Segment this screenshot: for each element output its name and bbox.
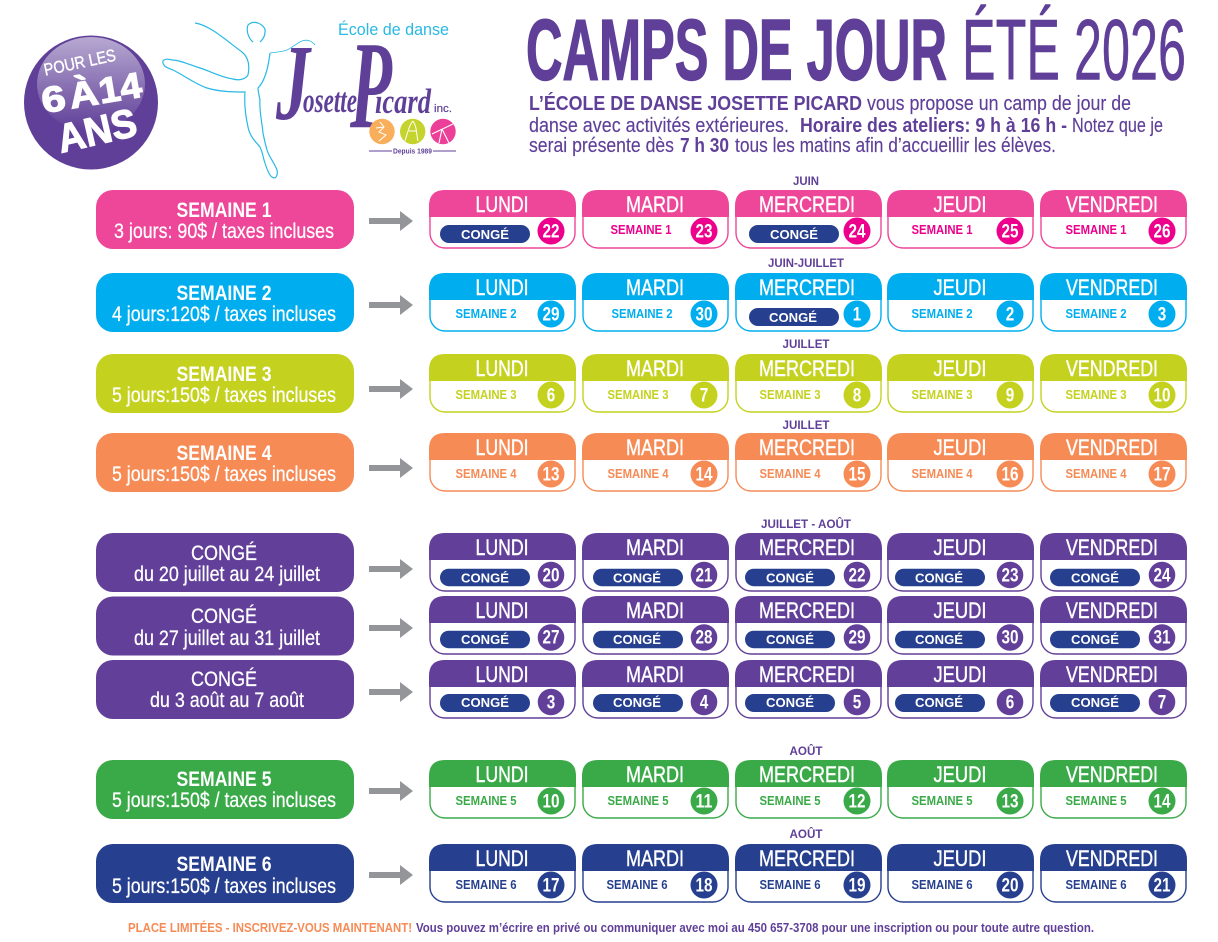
school name: École de danse xyxy=(338,20,449,39)
mercredi 24: 24 xyxy=(848,222,866,242)
row: semaine 2 xyxy=(96,256,1187,332)
mardi 11: 11 xyxy=(696,792,713,812)
vendredi 10: 10 xyxy=(1154,386,1170,406)
lundi 17: 17 xyxy=(542,876,560,896)
intro paragraph: Horaire des ateliers: 9 h à 16 h - xyxy=(800,115,1067,137)
intro paragraph: L’ÉCOLE DE DANSE JOSETTE PICARD xyxy=(529,92,862,115)
jeudi 9: 9 xyxy=(1006,386,1014,406)
icon: dancer outline xyxy=(163,22,315,178)
jeudi 25 xyxy=(887,190,1034,248)
lundi 6: 6 xyxy=(547,386,555,406)
intro paragraph xyxy=(529,92,1163,157)
vendredi 31: 31 xyxy=(1154,628,1171,648)
mercredi 15: MERCREDI xyxy=(759,435,855,460)
intro paragraph: tous les matins afin d’accueillir les élèves. xyxy=(735,135,1056,157)
jeudi 20: 20 xyxy=(1002,876,1018,896)
vendredi 31 xyxy=(1040,596,1187,654)
row: semaine 1 xyxy=(96,174,1187,249)
panel: semaine 6: SEMAINE 6 xyxy=(176,853,272,876)
lundi 6: SEMAINE 3 xyxy=(456,388,517,402)
jeudi 9 xyxy=(887,354,1034,412)
panel: semaine 2: SEMAINE 2 xyxy=(176,282,272,305)
signature: icard xyxy=(375,82,431,121)
panel: congé 2: CONGÉ xyxy=(191,605,257,628)
jeudi 30: JEUDI xyxy=(934,598,986,623)
panel: congé 1: du 20 juillet au 24 juillet xyxy=(134,563,320,586)
vendredi 10 xyxy=(1040,354,1187,412)
mardi 18: MARDI xyxy=(626,846,684,871)
mardi 23: 23 xyxy=(696,222,712,242)
vendredi 24: CONGÉ xyxy=(1071,570,1119,586)
lundi 3: CONGÉ xyxy=(461,695,509,710)
lundi 20 xyxy=(429,533,576,591)
vendredi 21: 21 xyxy=(1154,876,1171,896)
vendredi 7: VENDREDI xyxy=(1066,662,1158,687)
jeudi 16: JEUDI xyxy=(934,435,986,460)
jeudi 20: JEUDI xyxy=(934,846,986,871)
mercredi 22: 22 xyxy=(848,566,866,586)
footer note xyxy=(128,920,1094,935)
vendredi 31: CONGÉ xyxy=(1071,632,1119,647)
jeudi 9: SEMAINE 3 xyxy=(912,388,973,402)
mercredi 15 xyxy=(735,433,882,491)
jeudi 20: SEMAINE 6 xyxy=(912,878,973,892)
mardi 30 xyxy=(582,273,729,331)
jeudi 2: SEMAINE 2 xyxy=(912,307,973,321)
lundi 13: 13 xyxy=(542,464,560,486)
lundi 29: SEMAINE 2 xyxy=(456,307,517,321)
lundi 13 xyxy=(429,433,576,491)
mardi 4: CONGÉ xyxy=(613,695,661,710)
mercredi 5: 5 xyxy=(853,692,862,714)
icon: green dancer circle xyxy=(400,119,425,144)
jeudi 13: 13 xyxy=(1002,792,1018,812)
lundi 13: LUNDI xyxy=(476,435,528,460)
mardi 30: MARDI xyxy=(626,275,684,300)
jeudi 30: 30 xyxy=(1002,628,1018,648)
lundi 13: SEMAINE 4 xyxy=(456,467,517,481)
mercredi 19: MERCREDI xyxy=(759,846,855,871)
lundi 10: SEMAINE 5 xyxy=(456,794,517,808)
panel: congé 2: du 27 juillet au 31 juillet xyxy=(134,627,320,650)
vendredi 24: VENDREDI xyxy=(1066,535,1158,560)
vendredi 7: 7 xyxy=(1158,692,1166,714)
mardi 30: SEMAINE 2 xyxy=(612,307,673,321)
icon: orange dancer circle xyxy=(369,119,395,144)
vendredi 21 xyxy=(1040,844,1187,902)
vendredi 14: VENDREDI xyxy=(1066,762,1158,787)
vendredi 26: VENDREDI xyxy=(1066,192,1158,217)
mardi 14: SEMAINE 4 xyxy=(608,467,669,481)
month label: JUIN xyxy=(793,174,819,188)
arrow xyxy=(369,682,413,702)
panel: semaine 3 xyxy=(96,354,354,413)
lundi 22: CONGÉ xyxy=(461,227,509,242)
badge: ages 6 to 14: ANS xyxy=(53,101,141,162)
mercredi 5 xyxy=(735,660,882,718)
lundi 3: 3 xyxy=(547,692,555,714)
mardi 21: 21 xyxy=(696,566,713,586)
panel: congé 2 xyxy=(96,596,354,656)
panel: semaine 5: SEMAINE 5 xyxy=(176,768,272,791)
jeudi 9: JEUDI xyxy=(934,356,986,381)
vendredi 3: 3 xyxy=(1158,304,1166,326)
mercredi 19: SEMAINE 6 xyxy=(760,878,821,892)
jeudi 2: 2 xyxy=(1006,304,1014,326)
row: semaine 4 xyxy=(96,418,1187,492)
mardi 11: SEMAINE 5 xyxy=(608,794,669,808)
mercredi 19 xyxy=(735,844,882,902)
mardi 11: MARDI xyxy=(626,762,684,787)
mercredi 8: SEMAINE 3 xyxy=(760,388,821,402)
lundi 10 xyxy=(429,760,576,818)
vendredi 14: 14 xyxy=(1154,792,1171,812)
mercredi 12: 12 xyxy=(848,792,866,812)
arrow xyxy=(369,458,413,478)
vendredi 21: VENDREDI xyxy=(1066,846,1158,871)
jeudi 13: SEMAINE 5 xyxy=(912,794,973,808)
signature xyxy=(275,17,431,155)
panel: semaine 2: 4 jours:120$ / taxes incluses xyxy=(112,303,336,326)
mercredi 15: SEMAINE 4 xyxy=(760,467,821,481)
arrow xyxy=(369,295,413,315)
mardi 21: MARDI xyxy=(626,535,684,560)
mercredi 5: CONGÉ xyxy=(766,695,814,710)
lundi 3: LUNDI xyxy=(476,662,528,687)
row: congé 20-24 juillet xyxy=(96,516,1187,592)
badge: ages 6 to 14: À xyxy=(66,71,101,117)
month label: AOÛT xyxy=(790,826,823,841)
panel: semaine 6: 5 jours:150$ / taxes incluses xyxy=(112,875,336,898)
mardi 4: 4 xyxy=(700,692,709,714)
founding date: Depuis 1989 xyxy=(393,146,432,156)
vendredi 21: SEMAINE 6 xyxy=(1066,878,1127,892)
jeudi 2 xyxy=(887,273,1034,331)
mardi 4 xyxy=(582,660,729,718)
vendredi 14 xyxy=(1040,760,1187,818)
mardi 23: MARDI xyxy=(626,192,684,217)
vendredi 10: SEMAINE 3 xyxy=(1066,388,1127,402)
vendredi 24: 24 xyxy=(1154,566,1171,586)
mercredi 12 xyxy=(735,760,882,818)
vendredi 3: VENDREDI xyxy=(1066,275,1158,300)
jeudi 16: SEMAINE 4 xyxy=(912,467,973,481)
mercredi 8: 8 xyxy=(853,386,861,406)
signature: P xyxy=(349,17,393,155)
panel: semaine 3: SEMAINE 3 xyxy=(176,363,272,386)
founding date xyxy=(369,146,456,156)
mercredi 5: MERCREDI xyxy=(759,662,855,687)
arrow xyxy=(369,865,413,885)
month label: JUIN-JUILLET xyxy=(768,256,845,270)
mercredi 22: CONGÉ xyxy=(766,570,814,586)
mardi 28: MARDI xyxy=(626,598,684,623)
vendredi 17 xyxy=(1040,433,1187,491)
lundi 27: LUNDI xyxy=(476,598,528,623)
panel: congé 3 xyxy=(96,660,354,719)
mardi 21: CONGÉ xyxy=(613,570,661,586)
panel: semaine 2 xyxy=(96,273,354,332)
signature: J xyxy=(275,24,312,143)
mardi 28: CONGÉ xyxy=(613,632,661,647)
mardi 14: MARDI xyxy=(626,435,684,460)
mercredi 22: MERCREDI xyxy=(759,535,855,560)
arrow xyxy=(369,618,413,638)
vendredi 7: CONGÉ xyxy=(1071,695,1119,710)
mercredi 8: MERCREDI xyxy=(759,356,855,381)
logo: dancer and Josette Picard: inc. xyxy=(434,103,452,115)
vendredi 26: SEMAINE 1 xyxy=(1066,223,1127,237)
arrow xyxy=(369,559,413,579)
mardi 23: SEMAINE 1 xyxy=(610,223,672,237)
jeudi 23: JEUDI xyxy=(934,535,986,560)
vendredi 14: SEMAINE 5 xyxy=(1066,794,1127,808)
intro paragraph: danse avec activités extérieures. xyxy=(529,115,789,137)
jeudi 23 xyxy=(887,533,1034,591)
vendredi 24 xyxy=(1040,533,1187,591)
jeudi 20 xyxy=(887,844,1034,902)
badge: ages 6 to 14: POUR LES xyxy=(42,46,118,80)
jeudi 13 xyxy=(887,760,1034,818)
jeudi 6: 6 xyxy=(1006,692,1014,714)
arrow xyxy=(369,781,413,801)
vendredi 3 xyxy=(1040,273,1187,331)
intro paragraph: Notez que je xyxy=(1072,115,1163,137)
mercredi 12: SEMAINE 5 xyxy=(760,794,821,808)
mercredi 8 xyxy=(735,354,882,412)
jeudi 6: CONGÉ xyxy=(915,695,963,710)
vendredi 26: 26 xyxy=(1154,222,1170,242)
row: semaine 6 xyxy=(96,826,1187,903)
mercredi 1: CONGÉ xyxy=(769,310,817,325)
jeudi 16: 16 xyxy=(1002,464,1018,486)
lundi 22: LUNDI xyxy=(476,192,528,217)
jeudi 23: CONGÉ xyxy=(915,570,963,586)
vendredi 17: SEMAINE 4 xyxy=(1066,467,1127,481)
jeudi 13: JEUDI xyxy=(934,762,986,787)
jeudi 25: JEUDI xyxy=(934,192,986,217)
mercredi 29 xyxy=(735,596,882,654)
jeudi 6 xyxy=(887,660,1034,718)
mardi 18: 18 xyxy=(696,876,712,896)
mercredi 29: CONGÉ xyxy=(766,632,814,647)
lundi 22 xyxy=(429,190,576,248)
vendredi 17: VENDREDI xyxy=(1066,435,1158,460)
panel: semaine 4 xyxy=(96,433,354,492)
mardi 14: 14 xyxy=(696,464,713,486)
mercredi 1: MERCREDI xyxy=(759,275,855,300)
lundi 6 xyxy=(429,354,576,412)
lundi 29 xyxy=(429,273,576,331)
vendredi 26 xyxy=(1040,190,1187,248)
signature: osette xyxy=(303,81,357,120)
badge: ages 6 to 14: 14 xyxy=(95,64,145,112)
mardi 7: SEMAINE 3 xyxy=(608,388,669,402)
mardi 28 xyxy=(582,596,729,654)
mercredi 1 xyxy=(735,273,882,331)
jeudi 25: SEMAINE 1 xyxy=(912,223,973,237)
mercredi 29: MERCREDI xyxy=(759,598,855,623)
mardi 4: MARDI xyxy=(626,662,684,687)
lundi 29: 29 xyxy=(542,304,560,326)
lundi 20: 20 xyxy=(542,566,560,586)
mardi 18: SEMAINE 6 xyxy=(606,878,668,892)
vendredi 31: VENDREDI xyxy=(1066,598,1158,623)
panel: congé 1 xyxy=(96,533,354,592)
jeudi 25: 25 xyxy=(1002,222,1019,242)
icon: pink dancer circle xyxy=(430,119,456,144)
vendredi 10: VENDREDI xyxy=(1066,356,1158,381)
mardi 18 xyxy=(582,844,729,902)
mardi 7 xyxy=(582,354,729,412)
month label: JUILLET xyxy=(782,337,830,351)
jeudi 30: CONGÉ xyxy=(915,632,963,647)
month label: JUILLET - AOÛT xyxy=(761,516,852,531)
footer note: PLACE LIMITÉES - INSCRIVEZ-VOUS MAINTENANT! xyxy=(128,920,412,935)
row: congé 27-31 juillet xyxy=(96,596,1187,656)
mercredi 24: CONGÉ xyxy=(770,227,818,242)
mercredi 15: 15 xyxy=(848,464,866,486)
row: congé 3-7 août xyxy=(96,660,1187,719)
panel: congé 1: CONGÉ xyxy=(191,542,257,565)
panel: congé 3: CONGÉ xyxy=(191,668,257,691)
lundi 20: LUNDI xyxy=(476,535,528,560)
lundi 27: 27 xyxy=(542,628,560,648)
panel: semaine 1: SEMAINE 1 xyxy=(176,199,272,222)
mercredi 24 xyxy=(735,190,882,248)
row: semaine 5 xyxy=(96,743,1187,819)
mercredi 29: 29 xyxy=(848,628,866,648)
intro paragraph: serai présente dès xyxy=(529,135,674,157)
logo: dancer and Josette Picard xyxy=(163,17,456,178)
mercredi 24: MERCREDI xyxy=(759,192,855,217)
mardi 21 xyxy=(582,533,729,591)
lundi 22: 22 xyxy=(542,222,560,242)
mardi 7: 7 xyxy=(700,386,708,406)
mardi 14 xyxy=(582,433,729,491)
vendredi 17: 17 xyxy=(1154,464,1170,486)
panel: semaine 4: SEMAINE 4 xyxy=(176,442,272,465)
vendredi 7 xyxy=(1040,660,1187,718)
lundi 3 xyxy=(429,660,576,718)
mercredi 12: MERCREDI xyxy=(759,762,855,787)
vendredi 3: SEMAINE 2 xyxy=(1066,307,1127,321)
panel: semaine 1 xyxy=(96,190,354,249)
footer note: Vous pouvez m’écrire en privé ou communiquer avec moi au 450 657-3708 pour une inscription ou pour toute autre question. xyxy=(416,921,1094,935)
arrow xyxy=(369,379,413,399)
month label: AOÛT xyxy=(790,743,823,758)
lundi 6: LUNDI xyxy=(476,356,528,381)
badge: ages 6 to 14 xyxy=(24,36,158,170)
intro paragraph: 7 h 30 xyxy=(680,135,729,157)
mardi 23 xyxy=(582,190,729,248)
lundi 27 xyxy=(429,596,576,654)
panel: semaine 5: 5 jours:150$ / taxes incluses xyxy=(112,789,336,812)
jeudi 2: JEUDI xyxy=(934,275,986,300)
lundi 29: LUNDI xyxy=(476,275,528,300)
jeudi 30 xyxy=(887,596,1034,654)
row: semaine 3 xyxy=(96,337,1187,413)
mardi 11 xyxy=(582,760,729,818)
mardi 28: 28 xyxy=(696,628,712,648)
lundi 27: CONGÉ xyxy=(461,632,509,647)
panel: semaine 1: 3 jours: 90$ / taxes incluses xyxy=(114,220,334,243)
badge: ages 6 to 14: 6 xyxy=(38,77,69,121)
mercredi 1: 1 xyxy=(853,304,862,326)
panel: semaine 5 xyxy=(96,760,354,819)
jeudi 16 xyxy=(887,433,1034,491)
intro paragraph: vous propose un camp de jour de xyxy=(867,93,1131,115)
mardi 30: 30 xyxy=(696,304,712,326)
lundi 10: 10 xyxy=(542,792,560,812)
month label: JUILLET xyxy=(782,418,830,432)
lundi 20: CONGÉ xyxy=(461,570,509,586)
mercredi 22 xyxy=(735,533,882,591)
panel: congé 3: du 3 août au 7 août xyxy=(150,689,304,712)
jeudi 23: 23 xyxy=(1002,566,1018,586)
panel: semaine 6 xyxy=(96,844,354,903)
mercredi 19: 19 xyxy=(848,876,866,896)
mardi 7: MARDI xyxy=(626,356,684,381)
lundi 17 xyxy=(429,844,576,902)
lundi 10: LUNDI xyxy=(476,762,528,787)
lundi 17: LUNDI xyxy=(476,846,528,871)
jeudi 6: JEUDI xyxy=(934,662,986,687)
arrow xyxy=(369,211,413,231)
panel: semaine 4: 5 jours:150$ / taxes incluses xyxy=(112,463,336,486)
panel: semaine 3: 5 jours:150$ / taxes incluses xyxy=(112,384,336,407)
lundi 17: SEMAINE 6 xyxy=(456,878,517,892)
